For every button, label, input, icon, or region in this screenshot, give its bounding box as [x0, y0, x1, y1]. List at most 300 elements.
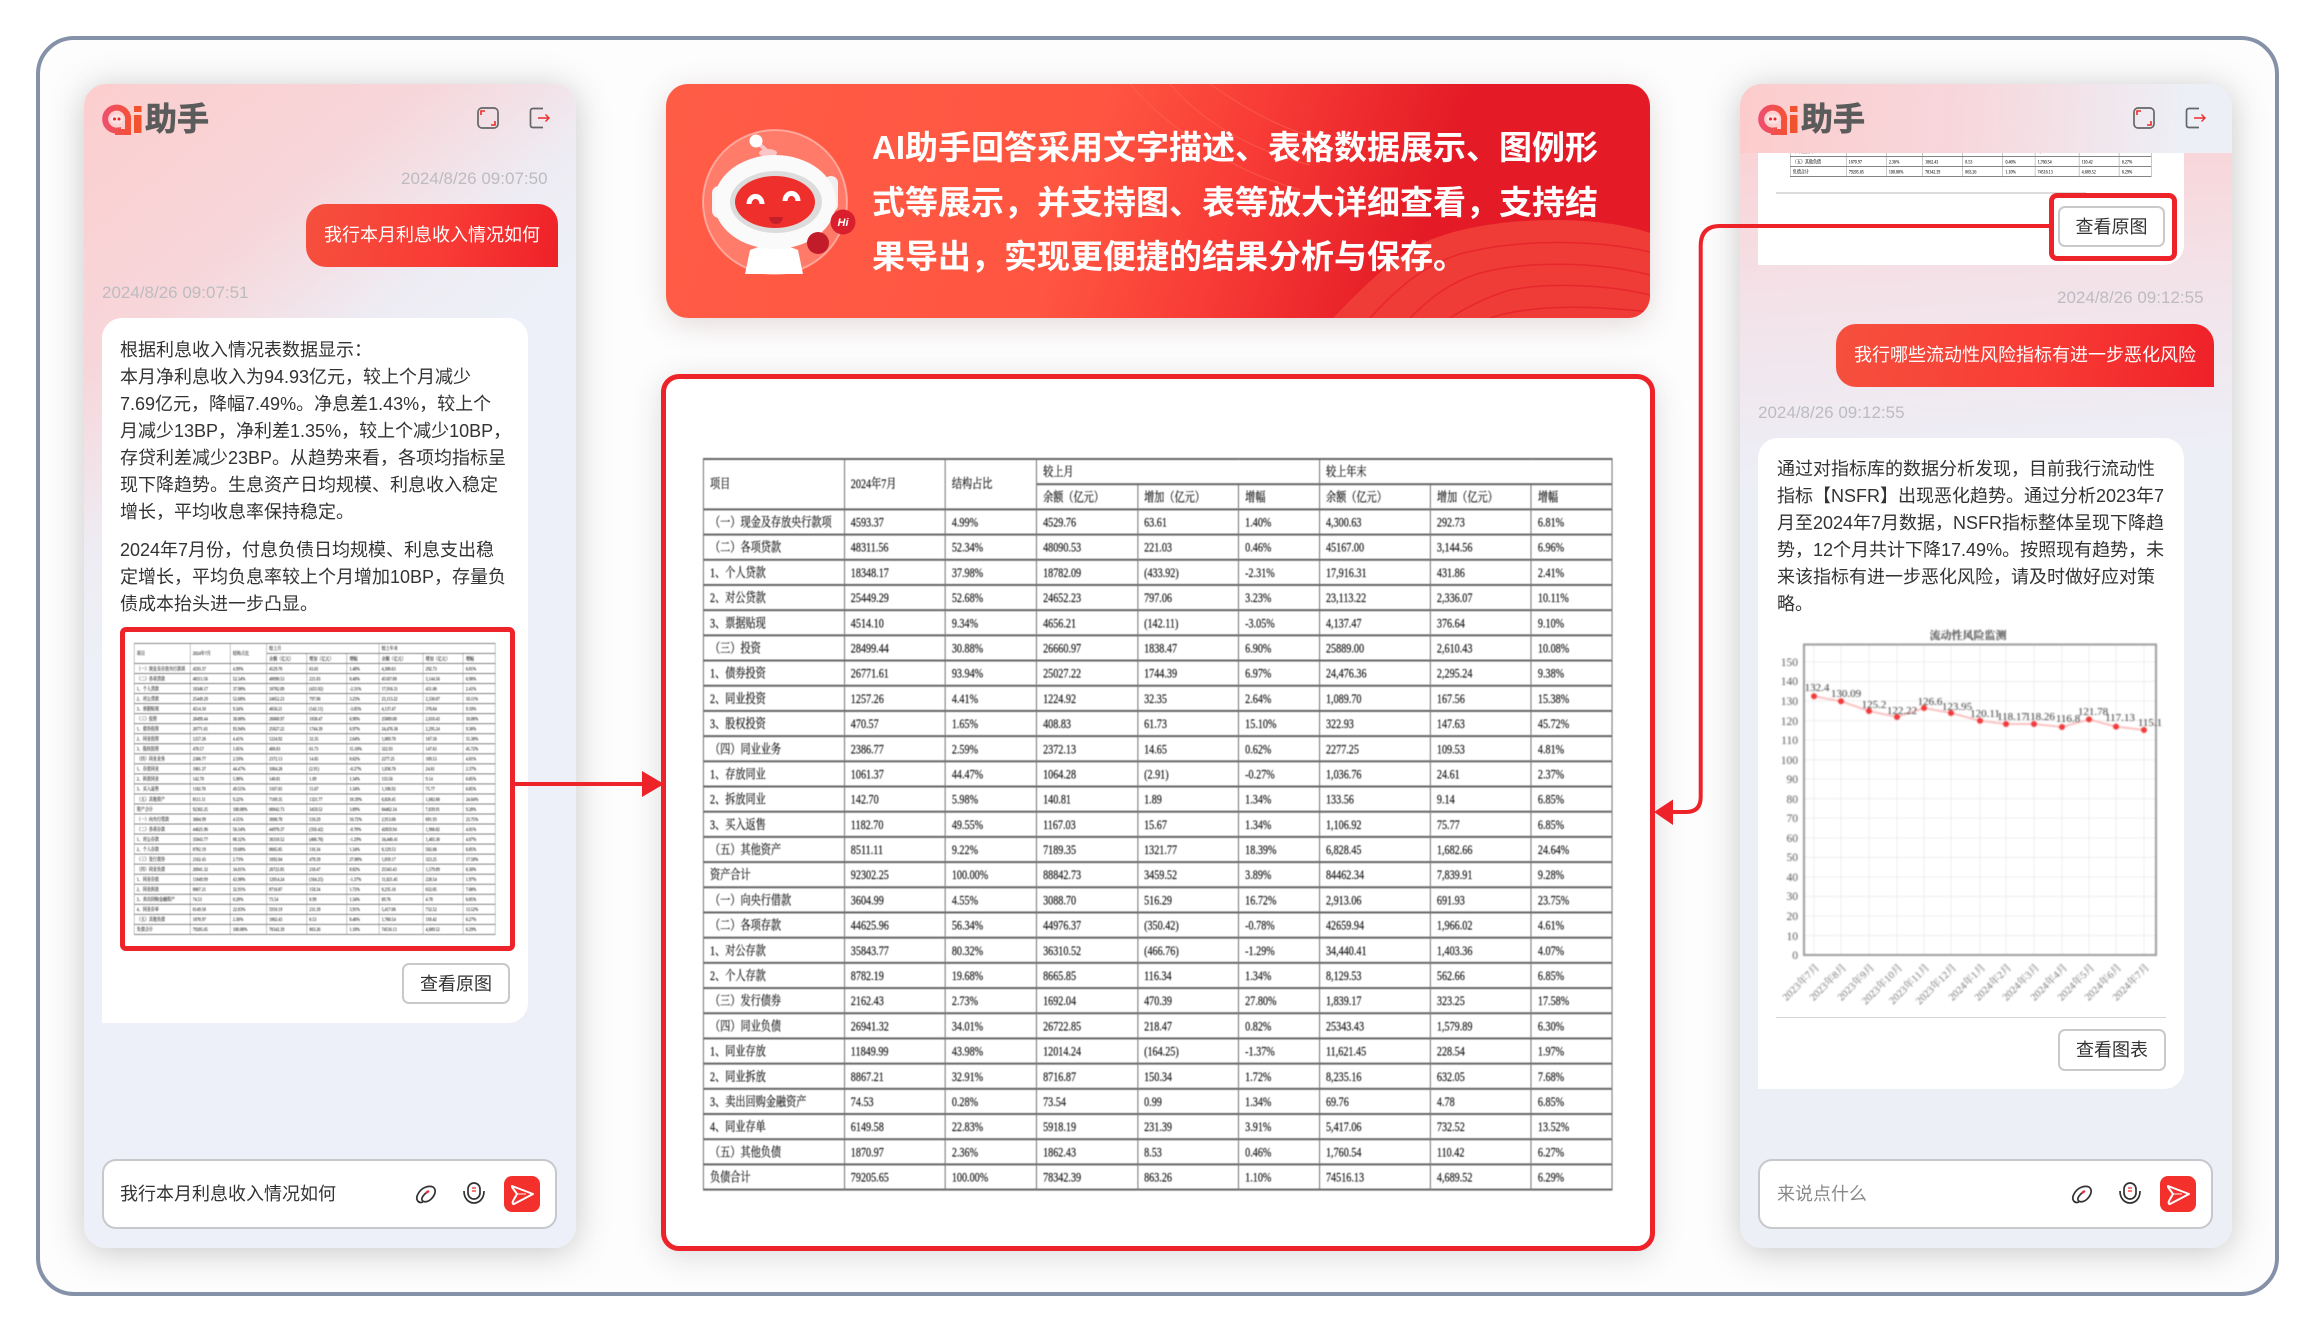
large data table: 133.56 — [1326, 791, 1354, 806]
data labels: 118.26 — [2025, 711, 2055, 723]
table thumbnail: 0.46% — [349, 675, 360, 681]
table thumbnail: 322.93 — [382, 746, 393, 752]
x axis date labels: 2023年9月 — [1835, 961, 1877, 1004]
cropped table rows: 4、同业存单 — [1793, 149, 1815, 155]
table thumbnail: 14.65 — [309, 756, 318, 762]
table thumbnail: 75.77 — [426, 786, 435, 792]
table thumbnail: 1,403.36 — [426, 836, 440, 842]
input box: 来说点什么 — [1777, 1184, 1867, 1204]
cropped table rows: 74516.13 — [2038, 169, 2053, 175]
table thumbnail: 1862.43 — [269, 916, 282, 922]
table thumbnail: 1061.37 — [193, 766, 206, 772]
large data table: 18348.17 — [851, 564, 889, 579]
large data table: 8716.87 — [1043, 1068, 1076, 1083]
table thumbnail: 4.07% — [466, 836, 476, 842]
timestamp: 2024/8/26 09:07:51 — [102, 283, 249, 302]
table thumbnail: 1、债券投资 — [137, 725, 159, 732]
table thumbnail: 4,137.47 — [382, 705, 396, 711]
table thumbnail: 9.10% — [466, 705, 476, 711]
table thumbnail: 24,476.36 — [382, 725, 398, 732]
large data table — [702, 457, 1614, 1192]
large data table: 6.81% — [1538, 514, 1564, 529]
divider — [1776, 192, 2086, 194]
table thumbnail: 408.83 — [269, 746, 280, 752]
large data table: 3604.99 — [851, 892, 884, 907]
answer text: 略。 — [1777, 594, 1813, 614]
table thumbnail: 0.62% — [349, 756, 360, 762]
large data table: (466.76) — [1144, 942, 1179, 957]
large data table: 3、股权投资 — [710, 715, 766, 731]
large data table: 7,839.91 — [1437, 867, 1472, 882]
table thumbnail: 116.34 — [309, 846, 320, 852]
table thumbnail: 18348.17 — [193, 685, 208, 691]
table thumbnail: 3、卖出回购金融资产 — [137, 896, 175, 902]
table thumbnail: 42659.94 — [382, 826, 397, 832]
large data table: 2277.25 — [1326, 741, 1359, 756]
table thumbnail: 110.42 — [426, 916, 437, 922]
table thumbnail: 35843.77 — [193, 836, 208, 842]
large data table: 1.72% — [1245, 1068, 1271, 1083]
table thumbnail: 22.83% — [233, 906, 245, 912]
table thumbnail: (142.11) — [309, 705, 323, 711]
y axis labels: 90 — [1786, 774, 1798, 786]
large data table: 6.90% — [1245, 640, 1271, 655]
table thumbnail: 1.40% — [349, 665, 360, 671]
large data table: 1,682.66 — [1437, 841, 1472, 857]
table thumbnail: 88842.73 — [269, 806, 284, 812]
large data table: 23.75% — [1538, 892, 1569, 907]
large data table: 4.55% — [952, 892, 978, 907]
table thumbnail: 1870.97 — [193, 916, 206, 922]
large data table: 项目 — [710, 476, 730, 491]
table thumbnail: 1,966.02 — [426, 826, 440, 832]
x axis date labels: 2024年6月 — [2082, 961, 2124, 1004]
table thumbnail: （三）投资 — [137, 715, 157, 721]
large data table: 2.36% — [952, 1144, 978, 1159]
answer text: 存贷利差减少23BP。从趋势来看，各项均指标呈 — [120, 448, 506, 468]
large data table: 3、买入返售 — [710, 816, 766, 831]
arrow: view original button to enlarged table — [1655, 224, 2049, 825]
large data table: 75.77 — [1437, 816, 1460, 831]
table thumbnail: 26722.85 — [269, 866, 284, 872]
large data table: 863.26 — [1144, 1169, 1172, 1184]
answer text: 通过对指标库的数据分析发现，目前我行流动性 — [1777, 459, 2155, 479]
x axis date labels: 2024年7月 — [2110, 961, 2152, 1004]
large data table: 负债合计 — [710, 1169, 751, 1184]
large data table: (350.42) — [1144, 917, 1179, 932]
table thumbnail: 5.98% — [233, 776, 243, 782]
large data table: 1,089.70 — [1326, 690, 1361, 705]
table thumbnail: -1.37% — [349, 876, 361, 882]
table thumbnail: 4593.37 — [193, 665, 206, 671]
large data table: 24.61 — [1437, 766, 1460, 781]
button: view chart — [2058, 1029, 2166, 1071]
arrow: thumbnail to enlarged table — [515, 771, 661, 797]
large data table: 0.46% — [1245, 539, 1271, 554]
input box — [1758, 1159, 2213, 1229]
large data table: 2,295.24 — [1437, 665, 1472, 680]
table thumbnail: 221.03 — [309, 675, 320, 681]
table thumbnail: 9.28% — [466, 806, 476, 812]
answer text: 指标【NSFR】出现恶化趋势。通过分析2023年7 — [1777, 486, 2164, 506]
table thumbnail: 增加（亿元） — [426, 655, 450, 661]
icon: attachment — [2072, 1186, 2092, 1204]
table thumbnail: （五）其他负债 — [137, 916, 165, 922]
icon: send — [2160, 1176, 2196, 1212]
table thumbnail: 4529.76 — [269, 665, 282, 671]
table thumbnail: 4.55% — [233, 816, 243, 822]
large data table: 6.85% — [1538, 967, 1564, 983]
large data table: 较上年末 — [1326, 464, 1367, 479]
mascot robot — [702, 129, 856, 275]
table thumbnail: 10.08% — [466, 715, 478, 721]
large data table: 增加（亿元） — [1437, 489, 1498, 504]
large data table: 221.03 — [1144, 539, 1172, 554]
answer text: 势，12个月共计下降17.49%。按照现有趋势，未 — [1777, 540, 2164, 560]
large data table: 1.10% — [1245, 1169, 1271, 1184]
large data table: 140.81 — [1043, 791, 1071, 806]
large data table: 1,036.76 — [1326, 766, 1361, 781]
table thumbnail: 1、对公存款 — [137, 836, 159, 842]
table thumbnail: 3088.70 — [269, 816, 282, 822]
table thumbnail: -1.29% — [349, 836, 361, 842]
large data table: 110.42 — [1437, 1144, 1464, 1159]
large data table: 1、债券投资 — [710, 665, 766, 680]
large data table: 15.38% — [1538, 690, 1569, 705]
answer text: 来该指标有进一步恶化风险，请及时做好应对策 — [1777, 567, 2155, 587]
large data table: 0.46% — [1245, 1144, 1271, 1159]
table thumbnail: 0.82% — [349, 866, 360, 872]
table thumbnail: 6.27% — [466, 916, 476, 922]
table thumbnail: 376.64 — [426, 705, 437, 711]
table thumbnail: 44.47% — [233, 766, 245, 772]
timestamp: 2024/8/26 09:12:55 — [2057, 288, 2204, 307]
large data table: 100.00% — [952, 867, 988, 882]
table thumbnail: 24652.23 — [269, 695, 284, 701]
large data table: 516.29 — [1144, 892, 1172, 907]
table thumbnail: 4,689.52 — [426, 926, 440, 932]
large data table: （四）同业业务 — [710, 741, 781, 756]
large data table: 12014.24 — [1043, 1043, 1081, 1058]
table thumbnail: 2162.43 — [193, 856, 206, 862]
large data table: 1,403.36 — [1437, 942, 1472, 957]
large data table: 8.53 — [1144, 1144, 1162, 1159]
x axis date labels: 2024年5月 — [2055, 961, 2097, 1004]
table thumbnail: 1、存放同业 — [137, 766, 159, 772]
button: view chart: 查看图表 — [2076, 1040, 2148, 1060]
large data table: 43.98% — [952, 1043, 983, 1058]
table thumbnail: 26660.97 — [269, 715, 284, 721]
large data table: （三）发行债券 — [710, 993, 781, 1008]
large data table: 2.37% — [1538, 766, 1564, 781]
data labels: 115.1 — [2138, 717, 2162, 729]
cropped table rows: 100.00% — [1889, 169, 1903, 175]
table thumbnail: 3.23% — [349, 695, 360, 701]
table thumbnail: 56.34% — [233, 826, 245, 832]
large data table: 32.35 — [1144, 690, 1167, 705]
table thumbnail: 1.89 — [309, 776, 316, 782]
large data table: 2.41% — [1538, 564, 1564, 579]
large data table: 1.34% — [1245, 816, 1271, 831]
data labels: 123.95 — [1942, 701, 1973, 713]
icon: microphone — [2119, 1182, 2141, 1204]
large data table: 24,476.36 — [1326, 665, 1367, 680]
x axis date labels: 2023年7月 — [1780, 961, 1822, 1004]
x axis date labels: 2023年11月 — [1886, 961, 1932, 1007]
table thumbnail: 1,682.66 — [426, 796, 440, 802]
large data table: 27.80% — [1245, 993, 1276, 1008]
table thumbnail: (164.25) — [309, 876, 323, 882]
large data table: 1.89 — [1144, 791, 1162, 806]
table thumbnail: 1182.70 — [193, 786, 206, 792]
table thumbnail: 2,295.24 — [426, 725, 440, 732]
table thumbnail: 6.90% — [349, 715, 360, 721]
large data table: 147.63 — [1437, 715, 1465, 731]
table thumbnail: 2277.25 — [382, 756, 395, 762]
data labels: 120.11 — [1970, 708, 2000, 720]
y axis labels: 30 — [1786, 891, 1798, 903]
large data table: 2.59% — [952, 741, 978, 756]
table thumbnail: 3、股权投资 — [137, 746, 159, 752]
large data table: 1321.77 — [1144, 841, 1177, 857]
large data table: 0.99 — [1144, 1093, 1162, 1108]
cropped table rows: 5918.19 — [1925, 149, 1938, 155]
table thumbnail: (466.76) — [309, 836, 323, 842]
table thumbnail: 增幅 — [349, 655, 358, 661]
table thumbnail: 5918.19 — [269, 906, 282, 912]
table thumbnail: （二）各项存款 — [137, 826, 165, 832]
large data table: 4.78 — [1437, 1093, 1455, 1108]
large data table: （二）各项贷款 — [710, 539, 781, 554]
x axis date labels: 2024年1月 — [1946, 961, 1988, 1004]
large data table: 1257.26 — [851, 690, 884, 705]
data labels: 122.22 — [1887, 705, 1917, 717]
large data table: 228.54 — [1437, 1043, 1465, 1058]
y axis labels: 130 — [1781, 696, 1798, 708]
large data table: 470.39 — [1144, 993, 1172, 1008]
icon: send — [504, 1176, 540, 1212]
table thumbnail: -3.05% — [349, 705, 361, 711]
table thumbnail: 11849.99 — [193, 876, 208, 882]
large data table: 3、卖出回购金融资产 — [710, 1093, 806, 1108]
large data table: 6.85% — [1538, 1093, 1564, 1108]
table thumbnail: 1,839.17 — [382, 856, 396, 862]
table thumbnail: 17.58% — [466, 856, 478, 862]
table thumbnail: 74516.13 — [382, 926, 397, 932]
icon: expand — [2133, 107, 2155, 129]
large data table: 资产合计 — [710, 867, 751, 882]
large data table: 3088.70 — [1043, 892, 1076, 907]
large data table: 48311.56 — [851, 539, 888, 554]
panel: left chat window — [84, 84, 576, 1248]
large data table: 1,760.54 — [1326, 1144, 1361, 1159]
large data table: 9.38% — [1538, 665, 1564, 680]
user message bubble — [306, 204, 558, 267]
cropped table rows: 6.27% — [2122, 159, 2132, 165]
large data table: 88842.73 — [1043, 867, 1081, 882]
answer text — [1777, 459, 2164, 614]
data labels: 132.4 — [1805, 682, 1830, 694]
large data table: 231.39 — [1144, 1119, 1172, 1134]
cropped table rows: 22.83% — [1889, 149, 1901, 155]
large data table: 1744.39 — [1144, 665, 1177, 680]
large data table: 6,828.45 — [1326, 841, 1361, 857]
table thumbnail: 6.30% — [466, 866, 476, 872]
large data table: 10.08% — [1538, 640, 1569, 655]
table thumbnail: 7189.35 — [269, 796, 282, 802]
y axis labels: 0 — [1792, 950, 1798, 962]
y axis labels: 70 — [1786, 813, 1798, 825]
table thumbnail: 8511.11 — [193, 796, 206, 802]
table thumbnail: 余额（亿元） — [382, 655, 406, 661]
table thumbnail: 48311.56 — [193, 675, 208, 681]
table thumbnail: 292.73 — [426, 665, 437, 671]
table thumbnail: 6149.58 — [193, 906, 206, 912]
answer bubble — [1758, 438, 2184, 1089]
large data table: 1870.97 — [851, 1144, 884, 1159]
large data table: 6149.58 — [851, 1119, 884, 1134]
table thumbnail: 49.55% — [233, 786, 245, 792]
table thumbnail: 142.70 — [193, 776, 204, 782]
table thumbnail: 92302.25 — [193, 806, 208, 812]
large data table: 63.61 — [1144, 514, 1167, 529]
table thumbnail: 7.68% — [466, 886, 476, 892]
table thumbnail: 632.05 — [426, 886, 437, 892]
table thumbnail: 4656.21 — [269, 705, 282, 711]
large data table: 余额（亿元） — [1043, 489, 1104, 504]
banner — [666, 84, 1650, 318]
table thumbnail: 100.00% — [233, 926, 247, 932]
answer text — [120, 340, 511, 614]
table thumbnail: 218.47 — [309, 866, 320, 872]
table thumbnail: 较上月 — [269, 645, 281, 651]
table thumbnail: 1.72% — [349, 886, 360, 892]
x axis date labels — [1780, 961, 2152, 1007]
large data table: 5.98% — [952, 791, 978, 806]
table thumbnail: 36310.52 — [269, 836, 284, 842]
table thumbnail: 1257.26 — [193, 736, 206, 742]
table thumbnail: 19.68% — [233, 846, 245, 852]
table thumbnail: 8,235.16 — [382, 886, 396, 892]
table thumbnail: (2.91) — [309, 766, 319, 772]
large data table: 1.34% — [1245, 791, 1271, 806]
large data table: 3.89% — [1245, 867, 1271, 882]
large data table: -1.37% — [1245, 1043, 1275, 1058]
large data table: （三）投资 — [710, 640, 761, 655]
large data table: 408.83 — [1043, 715, 1071, 731]
table thumbnail: 28499.44 — [193, 715, 208, 721]
large data table: 17.58% — [1538, 993, 1569, 1008]
large data table: -2.31% — [1245, 564, 1275, 579]
table thumbnail: 431.86 — [426, 685, 437, 691]
large data table: 3、票据贴现 — [710, 615, 766, 630]
table thumbnail: 1,579.89 — [426, 866, 440, 872]
banner text — [872, 129, 1598, 275]
large data table: 9.34% — [952, 615, 978, 630]
cropped table rows: 6149.58 — [1849, 149, 1862, 155]
table thumbnail: 1,760.54 — [382, 916, 396, 922]
table thumbnail: 负债合计 — [137, 926, 153, 932]
table thumbnail: 27.80% — [349, 856, 362, 862]
table thumbnail: 18782.09 — [269, 685, 284, 691]
table thumbnail: 100.00% — [233, 806, 247, 812]
table thumbnail: 9.22% — [233, 796, 243, 802]
table thumbnail: 3、票据贴现 — [137, 705, 159, 711]
large data table: 732.52 — [1437, 1119, 1465, 1134]
table thumbnail: 增幅 — [466, 655, 474, 661]
y axis labels: 80 — [1786, 794, 1798, 806]
answer text: 本月净利息收入为94.93亿元，较上个月减少 — [120, 367, 471, 387]
table thumbnail: 9.38% — [466, 725, 476, 732]
large data table: 2、同业投资 — [710, 690, 766, 705]
table thumbnail: 24.61 — [426, 766, 435, 772]
table thumbnail: 16.72% — [349, 816, 362, 822]
large data table: 8782.19 — [851, 967, 884, 983]
large data table: 1838.47 — [1144, 640, 1177, 655]
large data table: 2,336.07 — [1437, 590, 1472, 605]
table thumbnail: 2.37% — [466, 766, 476, 772]
table thumbnail: 1.97% — [466, 876, 476, 882]
answer text: 增长，平均收息率保持稳定。 2024年7月份，付息负债日均规模、利息支出稳 — [120, 502, 494, 560]
table thumbnail: 228.54 — [426, 876, 437, 882]
large data table: 1,966.02 — [1437, 917, 1472, 932]
table thumbnail: 43.98% — [233, 876, 245, 882]
large data table: 2386.77 — [851, 741, 884, 756]
table thumbnail: 23,113.22 — [382, 695, 398, 701]
table thumbnail: 516.29 — [309, 816, 320, 822]
large data table: 26660.97 — [1043, 640, 1081, 655]
large data table: 376.64 — [1437, 615, 1465, 630]
large data table: 25343.43 — [1326, 1018, 1364, 1033]
highlight box around button — [2049, 192, 2177, 260]
banner text: 式等展示，并支持图、表等放大详细查看，支持结 — [872, 184, 1598, 220]
large data table: 增幅 — [1538, 489, 1558, 504]
large data table: 0.28% — [952, 1093, 978, 1108]
table thumbnail: 69.76 — [382, 896, 391, 902]
large data table: 0.82% — [1245, 1018, 1271, 1033]
cropped table rows: 231.39 — [1965, 149, 1976, 155]
table thumbnail: 26941.32 — [193, 866, 208, 872]
table thumbnail: 1、个人贷款 — [137, 685, 159, 691]
large data table: 2162.43 — [851, 993, 884, 1008]
table thumbnail: -2.31% — [349, 685, 361, 691]
table thumbnail: 8665.85 — [269, 846, 282, 852]
cropped table rows: 5,417.06 — [2038, 149, 2052, 155]
large data table: 56.34% — [952, 917, 983, 932]
large data table: 632.05 — [1437, 1068, 1465, 1083]
table thumbnail: 结构占比 — [233, 650, 249, 656]
large data table: 79205.65 — [851, 1169, 889, 1184]
table thumbnail: 2、个人存款 — [137, 846, 159, 852]
table thumbnail: 2.41% — [466, 685, 476, 691]
large data table: 6.29% — [1538, 1169, 1564, 1184]
y axis labels: 60 — [1786, 833, 1798, 845]
large data table: 45.72% — [1538, 715, 1569, 731]
cropped table rows: 1,760.54 — [2038, 159, 2052, 165]
large data table: 322.93 — [1326, 715, 1354, 731]
banner text: AI助手回答采用文字描述、表格数据展示、图例形 — [872, 129, 1598, 166]
large data table: 78342.39 — [1043, 1169, 1081, 1184]
large data table: 48090.53 — [1043, 539, 1081, 554]
y axis labels: 40 — [1786, 872, 1798, 884]
table thumbnail: 32.35 — [309, 736, 318, 742]
table thumbnail: 4.99% — [233, 665, 243, 671]
answer text: 7.69亿元，降幅7.49%。净息差1.43%，较上个 — [120, 394, 491, 414]
cropped table rows: 6.29% — [2122, 169, 2132, 175]
table thumbnail: 1.34% — [349, 896, 360, 902]
large data table: 1、存放同业 — [710, 766, 766, 781]
large data table: 42659.94 — [1326, 917, 1364, 932]
